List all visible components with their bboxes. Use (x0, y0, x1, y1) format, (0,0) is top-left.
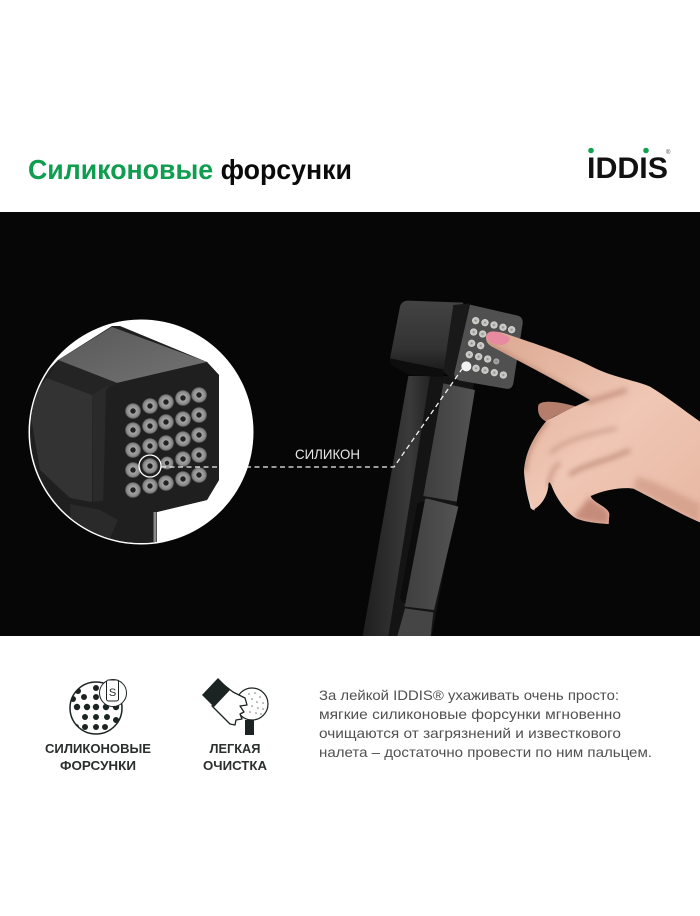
icon: silicone nozzles: S (109, 687, 116, 699)
zoom circle: nozzles close-up (20, 320, 254, 560)
description text: налета – достаточно провести по ним пальцем. (319, 744, 652, 760)
icon: silicone nozzles (70, 680, 126, 734)
description text: За лейкой IDDIS® ухаживать очень просто: (319, 687, 619, 703)
photo: hand (486, 331, 700, 524)
logo: IDDIS: ® (666, 149, 671, 156)
description text (319, 687, 652, 760)
description text: мягкие силиконовые форсунки мгновенно (319, 706, 621, 722)
logo: IDDIS: IDDIS (587, 152, 668, 185)
description text: очищаются от загрязнений и известкового (319, 725, 621, 741)
nozzle grid (125, 387, 207, 498)
label: easy cleaning: ЛЕГКАЯ (210, 742, 261, 756)
callout: dashed leader line (161, 369, 462, 467)
text: ФОРСУНКИ (60, 759, 136, 773)
callout: силикон label: СИЛИКОН (295, 446, 360, 462)
title: Силиконовые форсунки (28, 154, 352, 185)
photo panel (0, 212, 700, 636)
text: ОЧИСТКА (203, 759, 267, 773)
icon: easy cleaning (202, 678, 268, 735)
nozzles (466, 317, 515, 379)
product: shower head (363, 301, 523, 636)
label: silicone nozzles: СИЛИКОНОВЫЕ (45, 742, 151, 756)
